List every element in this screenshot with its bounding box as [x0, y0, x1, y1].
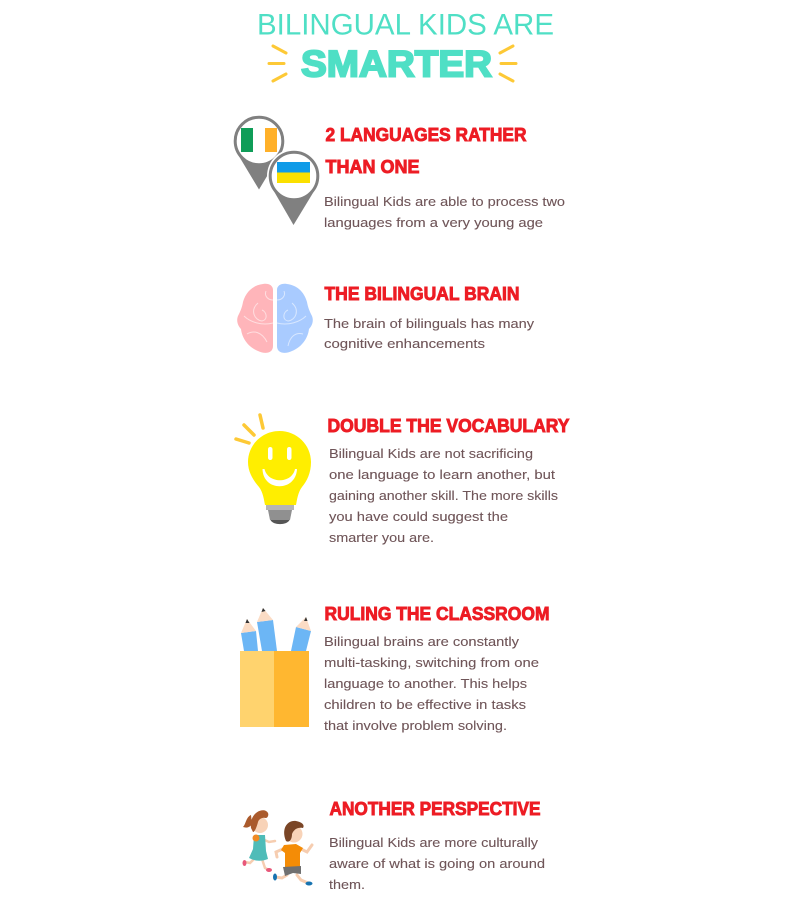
title line: Smarter: SMARTER [301, 44, 492, 84]
panel: another perspective [242, 798, 545, 892]
text block: Bilingual Kids are more culturally [329, 835, 539, 850]
icon: flag pins [235, 117, 321, 225]
text block [329, 835, 545, 892]
icon: left sparkle rays [269, 46, 286, 81]
panel: ruling the classroom [240, 603, 550, 733]
text block: you have could suggest the [329, 509, 508, 524]
text block [329, 446, 559, 545]
text block [324, 316, 535, 351]
heading: THAN ONE [326, 156, 420, 177]
text block: language to another. This helps [324, 676, 528, 691]
text block: cognitive enhancements [324, 336, 486, 351]
text block: children to be effective in tasks [324, 697, 527, 712]
text block: aware of what is going on around [329, 856, 545, 871]
text block: that involve problem solving. [324, 718, 507, 733]
heading: THE BILINGUAL BRAIN [324, 283, 520, 304]
title line: Bilingual Kids Are: BILINGUAL KIDS ARE [257, 8, 554, 42]
panel: double the vocabulary [236, 415, 570, 545]
icon: brain [237, 284, 313, 353]
text block [324, 194, 565, 230]
title [257, 8, 554, 84]
text block: them. [329, 877, 365, 892]
girl [242, 810, 275, 872]
text block: Bilingual brains are constantly [324, 634, 520, 649]
text block: Bilingual Kids are able to process two [324, 194, 565, 209]
panel: the bilingual brain [237, 283, 535, 353]
text block: smarter you are. [329, 530, 434, 545]
icon: running children [242, 810, 312, 886]
text block: languages from a very young age [324, 215, 543, 230]
boy [273, 821, 312, 886]
text block [324, 634, 539, 733]
icon: right sparkle rays [500, 46, 516, 81]
panel: 2 languages [235, 117, 565, 230]
text block: gaining another skill. The more skills [329, 488, 559, 503]
heading [326, 124, 526, 177]
text block: Bilingual Kids are not sacrificing [329, 446, 533, 461]
icon: pencils in a cup [240, 608, 311, 727]
heading: ANOTHER PERSPECTIVE [330, 798, 540, 819]
heading: 2 LANGUAGES RATHER [326, 124, 526, 145]
text block: multi-tasking, switching from one [324, 655, 539, 670]
heading: DOUBLE THE VOCABULARY [328, 415, 570, 436]
text block: one language to learn another, but [329, 467, 555, 482]
text block: The brain of bilinguals has many [324, 316, 535, 331]
icon: smiling light bulb [236, 415, 311, 524]
heading: RULING THE CLASSROOM [324, 603, 550, 624]
